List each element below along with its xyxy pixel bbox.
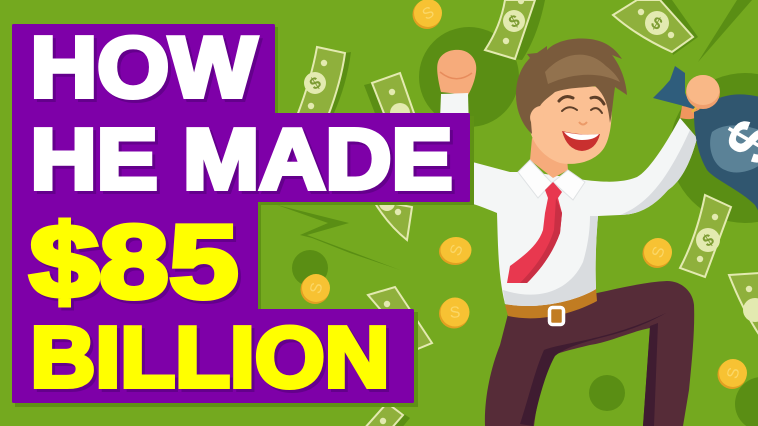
- hair highlight: [545, 55, 620, 84]
- panel shadow: [15, 27, 474, 407]
- bill behind panel: [368, 287, 432, 350]
- heading line: BILLION: BILLION: [34, 314, 392, 408]
- bag tie band: [692, 105, 699, 112]
- wrist: [680, 106, 700, 119]
- bill upper left: [297, 47, 351, 116]
- shirt shading: [503, 130, 697, 306]
- bill top centre: $: [506, 11, 523, 32]
- coin: [439, 298, 470, 328]
- face: [530, 86, 612, 164]
- bill top centre: [485, 0, 545, 60]
- heading line: HE MADE: HE MADE: [34, 116, 456, 210]
- heading line: HOW: HOW: [34, 24, 260, 118]
- neck: [530, 138, 568, 178]
- heading line: HE MADE: HE MADE: [30, 112, 452, 208]
- heading line: BILLION: BILLION: [30, 310, 390, 406]
- coin: S: [649, 244, 669, 260]
- collar: [518, 160, 585, 200]
- heading line: $85: $85: [30, 204, 238, 320]
- coin: [718, 359, 747, 389]
- title panel: [14, 20, 474, 408]
- bill upper left: $: [306, 73, 325, 94]
- bill right: $: [699, 230, 718, 251]
- nose: [579, 122, 587, 124]
- shirt body and arm: [465, 118, 697, 306]
- background dark circles and shards: [277, 0, 758, 426]
- left fist and sleeve: [437, 50, 476, 170]
- bill below panel: [373, 195, 412, 240]
- coin: [439, 237, 472, 265]
- bill bottom: [363, 403, 410, 426]
- heading line: $85: $85: [32, 208, 242, 324]
- money bag: [653, 66, 758, 214]
- belt: [505, 288, 597, 324]
- trousers: [485, 281, 694, 426]
- coin: [642, 238, 672, 268]
- coin: S: [449, 304, 461, 322]
- bill beside fist: [364, 73, 415, 123]
- closed eyes and brows: [559, 97, 604, 113]
- coin: S: [307, 281, 327, 296]
- smiling mouth: [562, 131, 600, 151]
- right fist: [686, 75, 720, 109]
- hair: [516, 39, 627, 134]
- heading line: HOW: HOW: [30, 20, 257, 116]
- character: man celebrating: [437, 39, 758, 426]
- bill top right: [613, 0, 698, 55]
- coin: S: [447, 242, 467, 258]
- bill top right: $: [648, 13, 666, 34]
- ear: [524, 103, 544, 129]
- tie: [507, 182, 562, 283]
- trouser shadows: [520, 313, 666, 426]
- coin: [300, 274, 330, 304]
- coin: S: [420, 4, 437, 24]
- bill far right: [729, 273, 758, 336]
- bill right: [680, 195, 731, 277]
- bag highlight: [710, 125, 758, 172]
- coin: [412, 0, 442, 29]
- purple panel: [14, 26, 468, 402]
- falling money bills: [297, 0, 758, 426]
- gold coins: [300, 0, 747, 389]
- coin: S: [724, 366, 744, 381]
